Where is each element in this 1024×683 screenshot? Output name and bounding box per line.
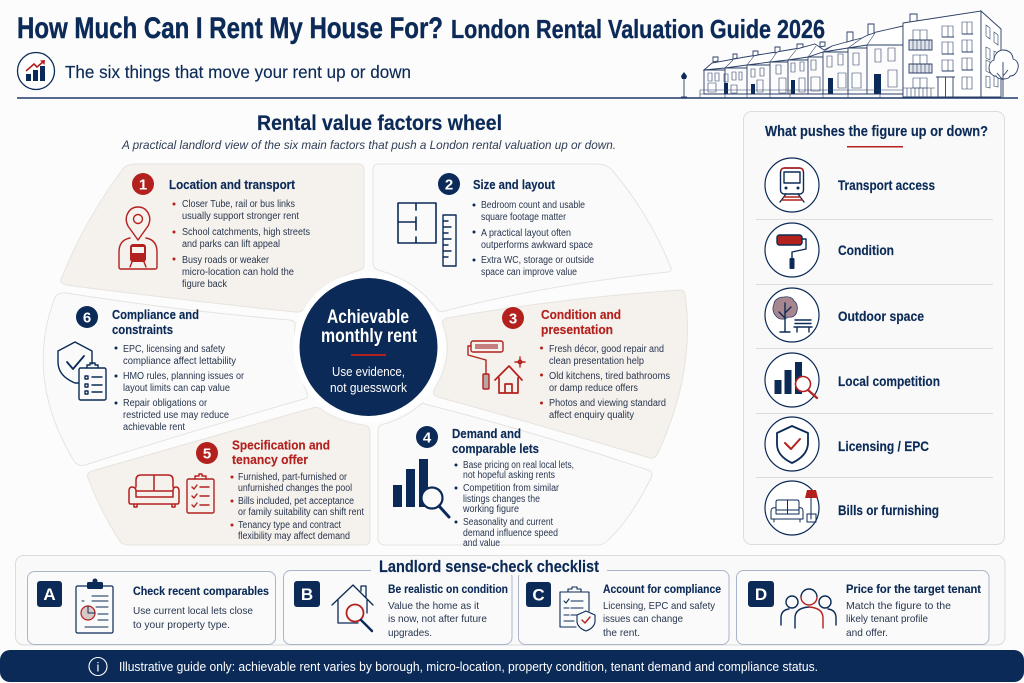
- panel: factor 2 size and layout: space can improve value: [481, 267, 577, 278]
- row: local competition: [765, 353, 940, 407]
- icon: bars and magnifier: [393, 459, 449, 517]
- panel: factor 3 condition and presentation: presentation: [541, 322, 613, 337]
- panel: factor 6 compliance and constraints: constraints: [112, 322, 173, 337]
- card B: be realistic on condition: B: [301, 585, 313, 604]
- row: outdoor space: [765, 288, 924, 342]
- panel: factor 5 specification and tenancy offer: Specification and: [232, 438, 330, 452]
- panel: factor 2 size and layout: 2: [445, 176, 453, 194]
- row: transport access: Transport access: [838, 178, 935, 193]
- panel: landlord sense-check checklist: [16, 556, 1005, 645]
- corner block: [903, 11, 1001, 97]
- card C: account for compliance: the rent.: [603, 627, 640, 639]
- panel: factor 4 demand and comparable lets: [378, 403, 652, 549]
- panel: factor 2 size and layout: Bedroom count and usable: [481, 200, 585, 211]
- panel: factor 6 compliance and constraints: Repair obligations or: [123, 398, 208, 409]
- panel: factor 5 specification and tenancy offer: Furnished, part-furnished or: [238, 472, 348, 483]
- panel: factor 6 compliance and constraints: restricted use may reduce: [123, 410, 229, 421]
- card D: price for the target tenant: [736, 570, 989, 644]
- row: local competition: Local competition: [838, 374, 940, 389]
- row: outdoor space: Outdoor space: [838, 309, 924, 324]
- panel: factor 4 demand and comparable lets: Demand and: [452, 426, 521, 441]
- card C: account for compliance: Licensing, EPC and safety: [603, 600, 716, 612]
- title: London Rental Valuation Guide 2026: [451, 14, 825, 44]
- row: condition: Condition: [838, 243, 894, 258]
- card D: price for the target tenant: Match the figure to the: [846, 600, 951, 612]
- panel: factor 5 specification and tenancy offer: or family suitability can shift rent: [238, 507, 364, 518]
- card C: account for compliance: Account for compliance: [603, 584, 721, 596]
- title: How Much Can I Rent My House For?: [17, 12, 443, 45]
- illustration: London terrace street: [17, 11, 1018, 98]
- row: condition: [765, 223, 894, 277]
- panel: factor 6 compliance and constraints: Compliance and: [112, 307, 199, 322]
- panel: what pushes the figure up or down: [744, 112, 1004, 544]
- checklist heading: Landlord sense-check checklist: [379, 558, 599, 576]
- panel: factor 1 location and transport: Closer Tube, rail or bus links: [182, 199, 295, 210]
- panel: factor 1 location and transport: usually support stronger rent: [182, 211, 299, 222]
- panel: factor 5 specification and tenancy offer: tenancy offer: [232, 452, 308, 467]
- panel: factor 1 location and transport: Location and transport: [169, 177, 296, 192]
- row: bills or furnishing: Bills or furnishing: [838, 503, 939, 518]
- card A: check recent comparables: A: [43, 585, 56, 604]
- row: bills or furnishing: [765, 481, 939, 535]
- card B: be realistic on condition: [284, 570, 512, 644]
- panel: factor 1 location and transport: School catchments, high streets: [182, 227, 310, 238]
- centre hub: achievable monthly rent: not guesswork: [330, 380, 407, 395]
- panel: factor 2 size and layout: A practical layout often: [481, 228, 571, 239]
- panel: factor 1 location and transport: [61, 164, 364, 312]
- panel: factor 3 condition and presentation: clean presentation help: [549, 356, 644, 367]
- panel: factor 5 specification and tenancy offer: Tenancy type and contract: [238, 520, 341, 531]
- panel: factor 4 demand and comparable lets: not hopeful asking rents: [463, 470, 555, 481]
- panel: factor 4 demand and comparable lets: and value: [463, 538, 500, 549]
- card C: account for compliance: issues can change: [603, 613, 683, 625]
- panel: factor 2 size and layout: Extra WC, storage or outside: [481, 255, 594, 266]
- row: transport access: [765, 158, 935, 212]
- panel: factor 5 specification and tenancy offer: [88, 407, 370, 545]
- card A: check recent comparables: to your property type.: [133, 619, 230, 631]
- panel: factor 3 condition and presentation: Condition and: [541, 307, 621, 322]
- panel: factor 5 specification and tenancy offer: 5: [203, 446, 211, 462]
- card A: check recent comparables: Check recent comparables: [133, 586, 269, 598]
- panel: factor 4 demand and comparable lets: 4: [423, 430, 432, 446]
- panel: factor 3 condition and presentation: Photos and viewing standard: [549, 398, 666, 409]
- terrace facades: [700, 45, 903, 98]
- card B: be realistic on condition: Value the home as it: [388, 600, 479, 612]
- icon: rising rent chart: [18, 52, 54, 90]
- footer disclaimer banner: i: [97, 660, 100, 674]
- card B: be realistic on condition: Be realistic on condition: [388, 584, 508, 596]
- panel: factor 6 compliance and constraints: compliance affect lettability: [123, 356, 236, 367]
- icon: sofa and checklist: [129, 474, 214, 513]
- footer disclaimer banner: [0, 650, 1024, 682]
- panel: factor 5 specification and tenancy offer: Bills included, pet acceptance: [238, 496, 354, 507]
- panel: factor 3 condition and presentation: [434, 290, 687, 458]
- terrace roofs: [704, 14, 917, 70]
- panel: factor 5 specification and tenancy offer: flexibility may affect demand: [238, 531, 350, 542]
- panel: factor 3 condition and presentation: Old kitchens, tired bathrooms: [549, 371, 670, 382]
- panel: factor 1 location and transport: figure back: [182, 279, 228, 290]
- street tree: [989, 50, 1018, 97]
- card A: check recent comparables: [28, 572, 276, 644]
- panel: factor 4 demand and comparable lets: demand influence speed: [463, 528, 558, 539]
- panel: factor 1 location and transport: micro-location can hold the: [182, 267, 294, 278]
- centre hub: achievable monthly rent: Achievable: [327, 307, 409, 328]
- panel: factor 4 demand and comparable lets: Competition from similar: [463, 483, 560, 494]
- panel: factor 1 location and transport: Busy roads or weaker: [182, 255, 270, 266]
- panel: factor 3 condition and presentation: or damp reduce offers: [549, 383, 638, 394]
- panel: factor 4 demand and comparable lets: Seasonality and current: [463, 517, 553, 528]
- panel: factor 6 compliance and constraints: layout limits can cap value: [123, 383, 230, 394]
- centre hub: achievable monthly rent: monthly rent: [321, 326, 418, 347]
- panel: factor 3 condition and presentation: Fresh décor, good repair and: [549, 344, 664, 355]
- centre hub: achievable monthly rent: [294, 272, 444, 422]
- card C: account for compliance: C: [532, 586, 545, 604]
- footer disclaimer banner: Illustrative guide only: achievable rent varies by borough, micro-location, property condition, tenant demand and compliance status.: [119, 659, 818, 674]
- panel: factor 6 compliance and constraints: achievable rent: [123, 422, 185, 433]
- panel: factor 1 location and transport: 1: [139, 176, 147, 194]
- card D: price for the target tenant: likely tenant profile: [846, 613, 928, 625]
- centre hub: achievable monthly rent: Use evidence,: [332, 364, 405, 379]
- card B: be realistic on condition: is now, not after future: [388, 613, 487, 625]
- panel: factor 6 compliance and constraints: 6: [83, 310, 91, 326]
- panel: factor 4 demand and comparable lets: Base pricing on real local lets,: [463, 460, 574, 471]
- panel: factor 4 demand and comparable lets: listings changes the: [463, 494, 540, 505]
- panel: factor 5 specification and tenancy offer: unfurnished changes the pool: [238, 483, 352, 494]
- panel: what pushes the figure up or down: What pushes the figure up or down?: [765, 123, 988, 140]
- icon: paint roller and house: [468, 341, 525, 393]
- wheel intro text: A practical landlord view of the six main factors that push a London rental valuation up or down.: [121, 138, 616, 152]
- panel: factor 2 size and layout: square footage matter: [481, 212, 567, 223]
- panel: factor 4 demand and comparable lets: working figure: [462, 504, 519, 515]
- card A: check recent comparables: Use current local lets close: [133, 605, 253, 617]
- panel: factor 3 condition and presentation: 3: [509, 310, 517, 328]
- panel: factor 1 location and transport: and parks can lift appeal: [182, 239, 280, 250]
- icon: pin and train: [119, 207, 157, 269]
- icon: floor plan and ruler: [398, 203, 456, 266]
- icon: shield and clipboard: [58, 342, 106, 400]
- title: [17, 12, 825, 45]
- panel: factor 6 compliance and constraints: [43, 293, 308, 466]
- heading: wheel: Rental value factors wheel: [257, 112, 502, 135]
- panel: factor 6 compliance and constraints: EPC, licensing and safety: [123, 344, 225, 355]
- panel: factor 6 compliance and constraints: HMO rules, planning issues or: [123, 371, 245, 382]
- subtitle: The six things that move your rent up or down: [65, 62, 411, 82]
- row: licensing and EPC: Licensing / EPC: [838, 439, 929, 454]
- street lamp: [681, 72, 687, 97]
- panel: factor 2 size and layout: Size and layout: [473, 177, 556, 192]
- card D: price for the target tenant: Price for the target tenant: [846, 584, 981, 596]
- card B: be realistic on condition: upgrades.: [388, 627, 432, 639]
- card D: price for the target tenant: D: [755, 585, 767, 604]
- panel: factor 3 condition and presentation: affect enquiry quality: [549, 410, 634, 421]
- card D: price for the target tenant: and offer.: [846, 627, 888, 639]
- panel: factor 4 demand and comparable lets: comparable lets: [452, 441, 539, 456]
- row: licensing and EPC: [765, 417, 929, 471]
- panel: factor 2 size and layout: [373, 164, 671, 312]
- card C: account for compliance: [518, 570, 729, 644]
- panel: factor 2 size and layout: outperforms awkward space: [481, 240, 593, 251]
